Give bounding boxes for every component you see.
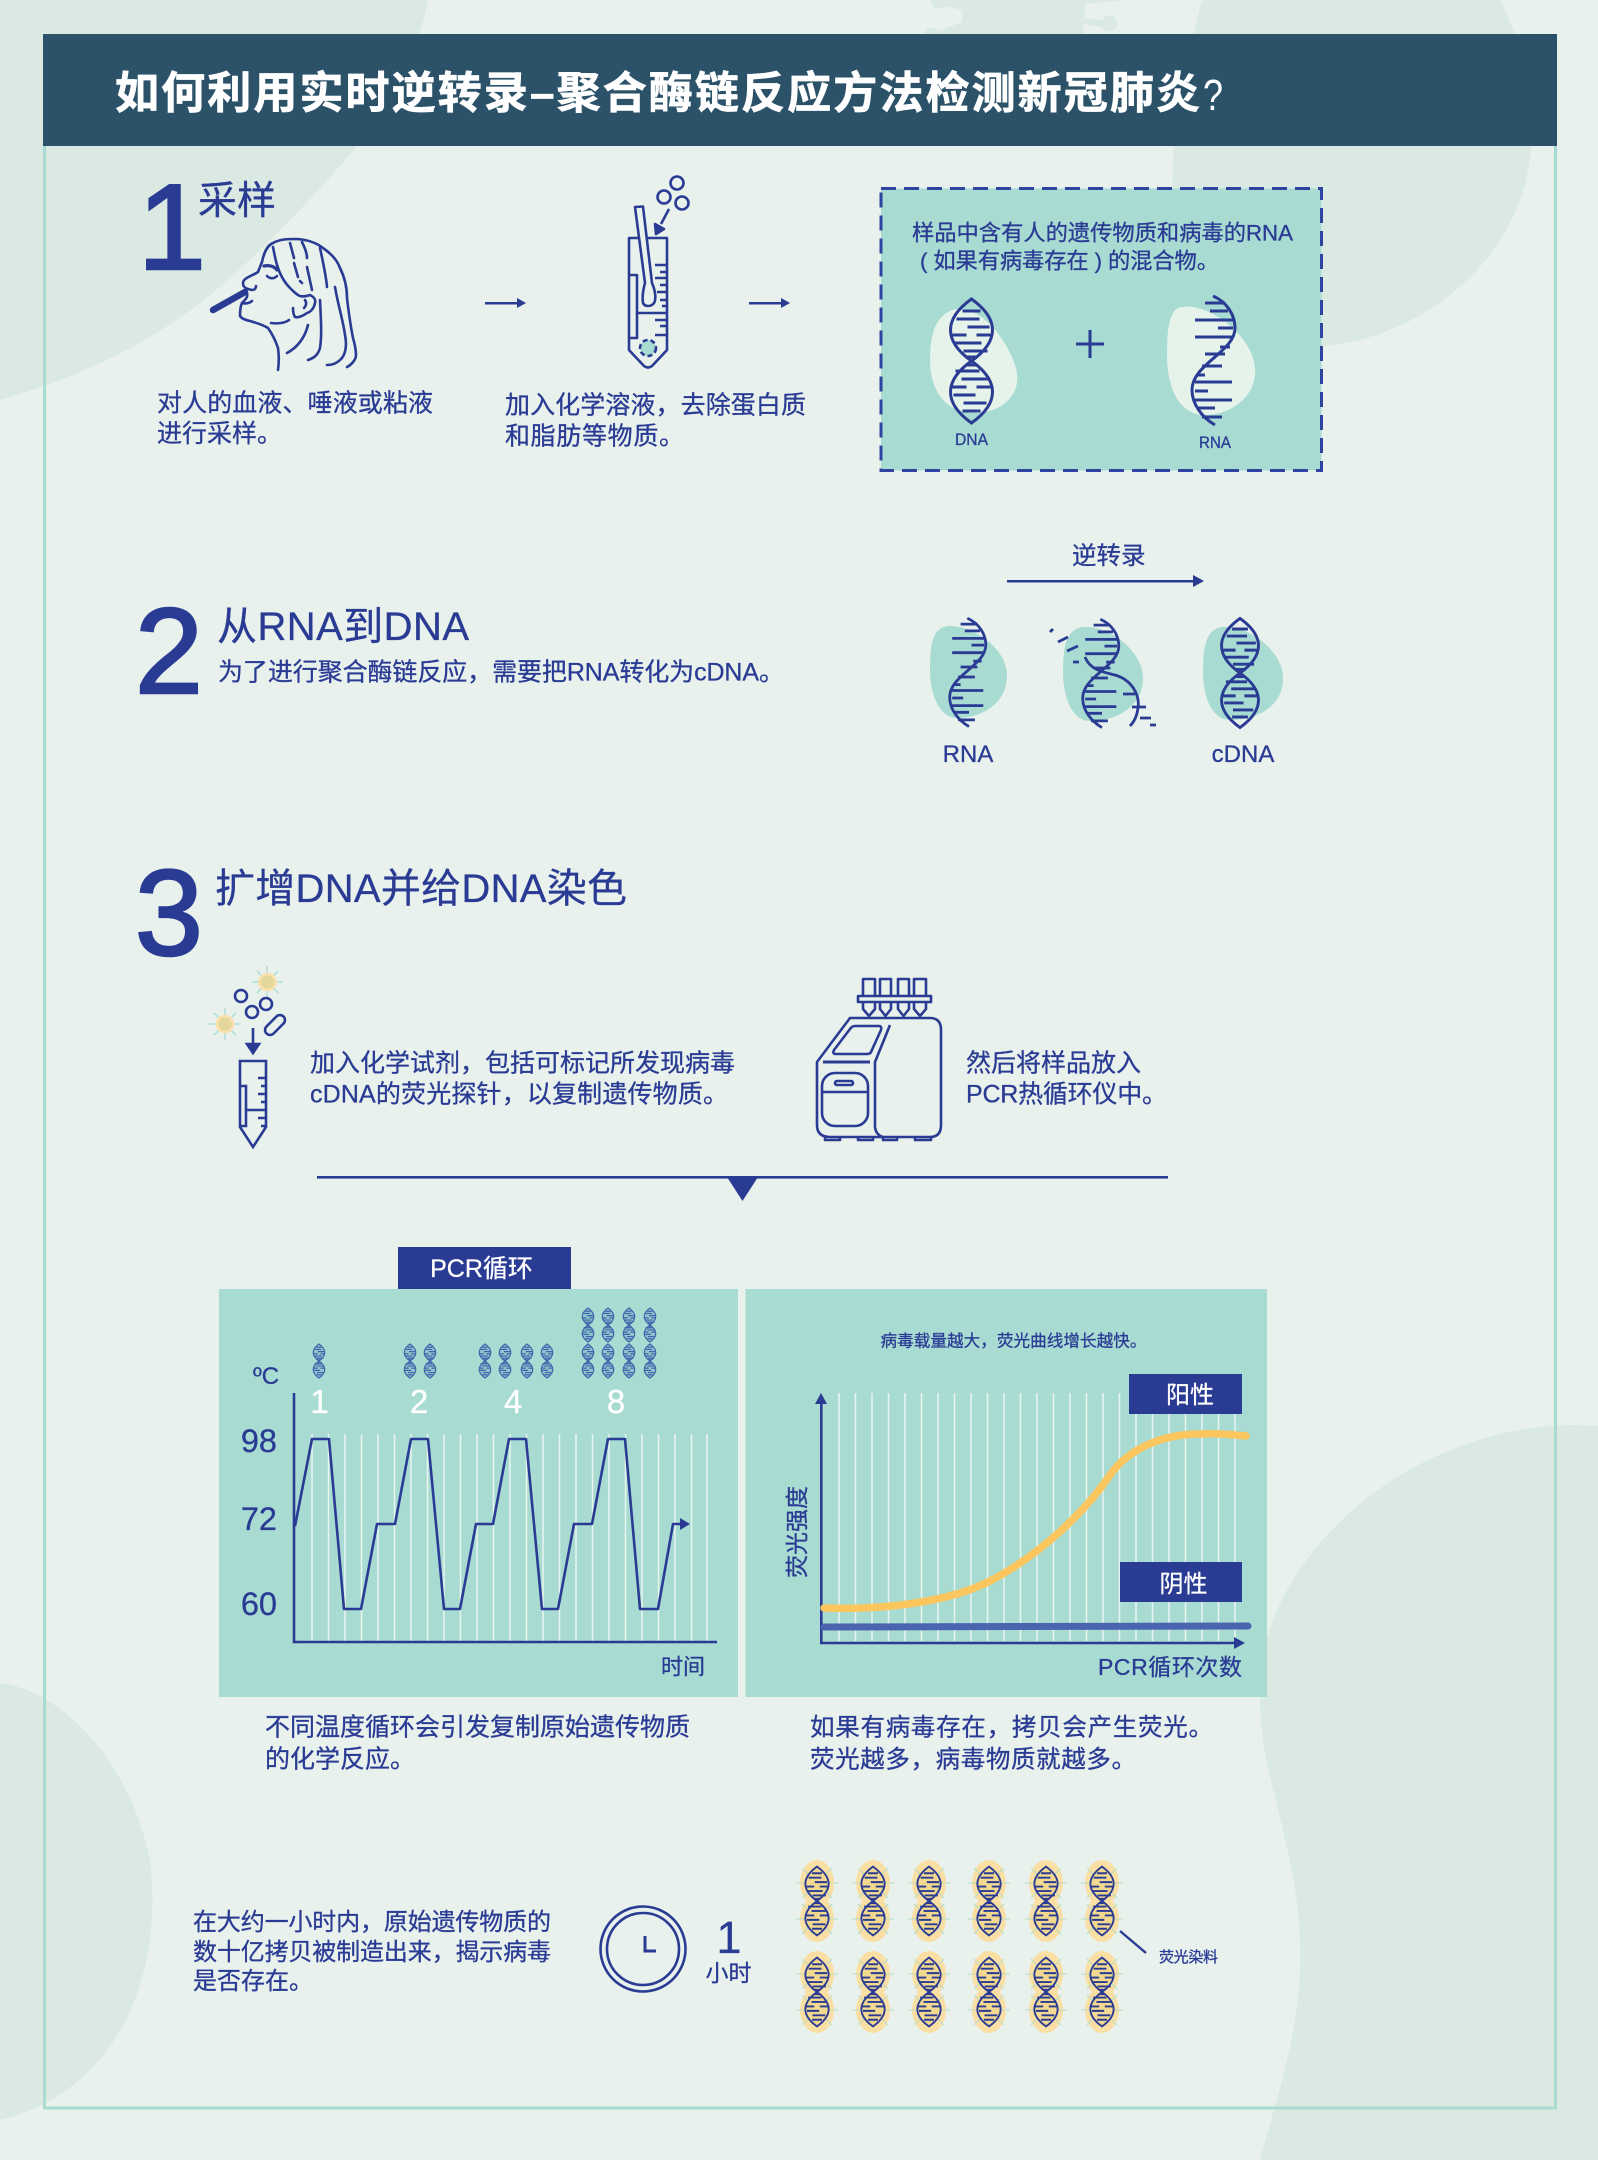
positive label: 阳性 — [1166, 1382, 1214, 1409]
step 1 text: sampling — [157, 390, 433, 448]
negative label: 阴性 — [1160, 1571, 1208, 1598]
step 1 number: 1 — [138, 159, 206, 295]
step 3 text: machine: 然后将样品放入 — [966, 1050, 1141, 1078]
axis labels: 60 — [241, 1586, 277, 1622]
step 1 text: chemical: 和脂肪等物质。 — [505, 422, 684, 450]
axis labels: 72 — [241, 1501, 277, 1537]
step 3 text: reagents — [310, 1050, 735, 1108]
title banner — [43, 34, 1557, 146]
panel: sample mixture — [881, 188, 1322, 470]
time label: 时间 — [661, 1654, 705, 1680]
axes — [815, 1393, 1245, 1649]
summary text — [193, 1909, 551, 1995]
DNA fluorescence grid — [796, 1860, 1123, 2033]
step 1 text: chemical: 加入化学溶液，去除蛋白质 — [505, 392, 806, 420]
pointer line — [1120, 1931, 1146, 1953]
left chart caption — [265, 1714, 690, 1774]
arrow: step 1 first — [485, 298, 526, 308]
panel: fluorescence chart — [746, 1289, 1267, 1697]
right chart caption — [810, 1714, 1213, 1774]
cycle numbers — [310, 1383, 625, 1420]
icon: RNA with blob — [1167, 296, 1255, 425]
icon: RNA — [930, 618, 1007, 727]
icon: test tube with swab — [629, 176, 688, 368]
PCR cycle tab — [398, 1247, 571, 1289]
title question mark: ? — [1203, 71, 1223, 120]
positive curve — [824, 1434, 1246, 1608]
step 3 text: reagents: cDNA的荧光探针，以复制遗传物质。 — [310, 1080, 728, 1108]
mixture text: 样品中含有人的遗传物质和病毒的RNA — [912, 220, 1293, 246]
icon: woman nasal swab — [213, 239, 356, 370]
icon: cDNA — [1203, 618, 1283, 728]
step 3 text: machine — [966, 1050, 1167, 1108]
RNA label: RNA — [1199, 433, 1232, 452]
cycle numbers: 4 — [504, 1383, 522, 1420]
fluorescent dye label: 荧光染料 — [1159, 1949, 1218, 1966]
right chart caption: 荧光越多，病毒物质就越多。 — [810, 1746, 1136, 1774]
axes — [294, 1393, 717, 1642]
step 1 heading: 采样 — [198, 180, 276, 223]
unit label: ºC — [253, 1363, 279, 1390]
cDNA caption: cDNA — [1212, 741, 1274, 768]
x axis label: PCR循环次数 — [1098, 1654, 1242, 1680]
title: 如何利用实时逆转录–聚合酶链反应方法检测新冠肺炎 — [115, 69, 1200, 118]
mixture text: ( 如果有病毒存在 ) 的混合物。 — [920, 248, 1219, 274]
grid lines — [839, 1393, 1235, 1641]
icon: transcription — [1050, 619, 1156, 728]
DNA label: DNA — [955, 430, 989, 449]
axis labels — [241, 1423, 277, 1622]
step 2 number: 2 — [135, 583, 203, 719]
RNA caption: RNA — [943, 741, 993, 768]
one hour label: 1 — [716, 1912, 742, 1963]
PCR cycle tab: PCR循环 — [430, 1255, 533, 1283]
cycle DNA icons — [313, 1308, 656, 1378]
divider with pointer — [317, 1176, 1168, 1201]
arrow: step 1 second — [749, 298, 790, 308]
temperature curve — [295, 1439, 682, 1609]
cycle numbers: 2 — [410, 1383, 428, 1420]
step 3 number: 3 — [135, 845, 203, 981]
icon: clock — [600, 1906, 686, 1992]
summary text: 在大约一小时内，原始遗传物质的 — [193, 1909, 551, 1936]
step 1 text: sampling: 进行采样。 — [157, 420, 282, 448]
grid lines — [312, 1434, 707, 1642]
one hour label: 小时 — [706, 1960, 752, 1986]
icon: reagents and tube — [209, 966, 287, 1147]
summary text: 数十亿拷贝被制造出来，揭示病毒 — [193, 1939, 551, 1966]
left chart caption: 不同温度循环会引发复制原始遗传物质 — [265, 1714, 690, 1742]
plus sign — [1076, 330, 1104, 358]
left chart caption: 的化学反应。 — [265, 1746, 415, 1774]
icon: PCR machine — [817, 979, 941, 1140]
step 3 text: machine: PCR热循环仪中。 — [966, 1080, 1167, 1108]
positive label — [1129, 1374, 1242, 1414]
one hour label — [706, 1912, 752, 1986]
step 3 text: reagents: 加入化学试剂，包括可标记所发现病毒 — [310, 1050, 735, 1078]
chart caption: 病毒载量越大，荧光曲线增长越快。 — [880, 1332, 1146, 1350]
icon: DNA with blob — [930, 299, 1017, 423]
right chart caption: 如果有病毒存在，拷贝会产生荧光。 — [810, 1714, 1213, 1742]
mixture text — [912, 220, 1293, 274]
step 2 heading: 从RNA到DNA — [217, 605, 469, 649]
step 2 text: 为了进行聚合酶链反应，需要把RNA转化为cDNA。 — [218, 658, 784, 686]
y axis label: 荧光强度 — [784, 1486, 810, 1578]
step 3 heading: 扩增DNA并给DNA染色 — [215, 867, 627, 911]
summary text: 是否存在。 — [193, 1968, 313, 1995]
axis labels: 98 — [241, 1423, 277, 1459]
cycle numbers: 1 — [310, 1383, 329, 1420]
curve arrow — [680, 1518, 690, 1530]
reverse transcription label: 逆转录 — [1072, 542, 1146, 570]
panel: PCR cycle chart — [219, 1247, 738, 1697]
negative line — [824, 1626, 1248, 1627]
step 1 text: sampling: 对人的血液、唾液或粘液 — [157, 390, 433, 418]
negative label — [1120, 1562, 1242, 1602]
cycle numbers: 8 — [607, 1383, 625, 1420]
arrow: reverse transcription — [1007, 575, 1204, 587]
step 1 text: chemical — [505, 392, 806, 450]
